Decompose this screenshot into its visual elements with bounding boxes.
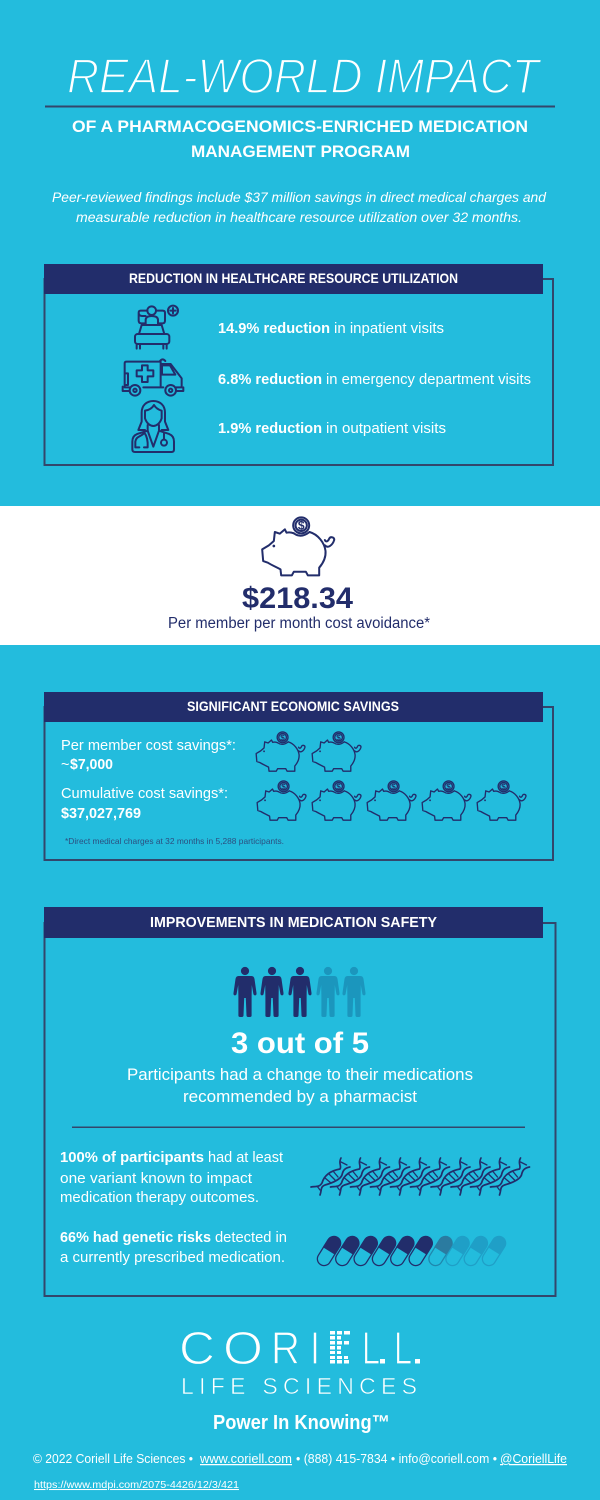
panel: economic savings bbox=[44, 692, 553, 860]
text: per member cost savings: $7,000 bbox=[70, 757, 113, 773]
footer contact line: © 2022 Coriell Life Sciences • bbox=[33, 1452, 193, 1466]
panel heading: improvements in medication safety bbox=[44, 907, 543, 938]
text: cumulative cost savings: $37,027,769 bbox=[61, 806, 141, 822]
logo wordmark: C bbox=[179, 1322, 215, 1374]
logo wordmark: R bbox=[271, 1322, 300, 1374]
panel heading: significant economic savings: SIGNIFICANT ECONOMIC SAVINGS bbox=[187, 699, 399, 714]
stat: emergency department visits: 6.8% reduction bbox=[218, 372, 322, 388]
caption: pharmacist recommendation: recommended by a pharmacist bbox=[183, 1088, 417, 1106]
icons: DNA helices bbox=[311, 1158, 530, 1195]
panel heading: significant economic savings bbox=[44, 692, 543, 722]
logo wordmark: L bbox=[362, 1322, 380, 1374]
text: per member cost savings: Per member cost savings*: bbox=[61, 738, 236, 754]
icons: ten capsules, six highlighted bbox=[314, 1233, 509, 1268]
caption: cost avoidance: Per member per month cost avoidance* bbox=[168, 615, 430, 632]
stat: emergency department visits: in emergency department visits bbox=[326, 372, 531, 388]
stat: inpatient visits bbox=[218, 321, 444, 337]
logo line: life sciences: LIFE SCIENCES bbox=[181, 1373, 417, 1399]
logo wordmark: L bbox=[394, 1322, 412, 1374]
icons: per member piggy banks bbox=[256, 732, 361, 771]
text: cumulative cost savings: Cumulative cost savings*: bbox=[61, 786, 228, 802]
stat: outpatient visits: in outpatient visits bbox=[326, 421, 446, 437]
intro paragraph bbox=[52, 189, 547, 225]
caption: pharmacist recommendation: Participants had a change to their medications bbox=[127, 1066, 473, 1084]
logo wordmark: O bbox=[223, 1322, 263, 1374]
title: REAL-WORLD IMPACT bbox=[67, 50, 542, 104]
text: per member cost savings: ~ bbox=[61, 757, 69, 773]
stat: inpatient visits: in inpatient visits bbox=[334, 321, 444, 337]
logo pixel letter E bbox=[330, 1331, 420, 1364]
icon: piggy bank with coin bbox=[262, 517, 334, 575]
title underline bbox=[45, 106, 555, 108]
stat: inpatient visits: 14.9% reduction bbox=[218, 321, 330, 337]
footer contact line bbox=[33, 1452, 567, 1466]
panel heading: reduction in utilization: REDUCTION IN HEALTHCARE RESOURCE UTILIZATION bbox=[129, 271, 458, 286]
footer contact line: @CoriellLife bbox=[500, 1452, 567, 1466]
icon: hospital bed bbox=[135, 306, 178, 349]
tagline: Power In Knowing™ bbox=[213, 1412, 390, 1434]
text: genetic risks: 66% had genetic risks bbox=[60, 1230, 211, 1246]
text: genetic risks bbox=[60, 1230, 287, 1266]
text: variants: had at least bbox=[208, 1150, 283, 1166]
subtitle bbox=[72, 117, 528, 161]
text: cumulative cost savings bbox=[61, 786, 228, 822]
stat: 3 out of 5: 3 out of 5 bbox=[231, 1027, 369, 1060]
caption: pharmacist recommendation bbox=[127, 1066, 473, 1106]
subtitle: MANAGEMENT PROGRAM bbox=[191, 142, 410, 161]
text: variants: medication therapy outcomes. bbox=[60, 1190, 259, 1206]
footer contact line: • (888) 415-7834 • info@coriell.com • bbox=[296, 1452, 497, 1466]
stat: outpatient visits: 1.9% reduction bbox=[218, 421, 322, 437]
stat: emergency department visits bbox=[218, 372, 531, 388]
text: genetic risks: a currently prescribed medication. bbox=[60, 1250, 285, 1266]
panel: cost avoidance band bbox=[0, 506, 600, 645]
text: variants: 100% of participants bbox=[60, 1150, 204, 1166]
icon: doctor bbox=[132, 401, 174, 452]
text: genetic risks: detected in bbox=[215, 1230, 287, 1246]
panel heading: improvements in medication safety: IMPROVEMENTS IN MEDICATION SAFETY bbox=[150, 915, 437, 931]
intro paragraph: measurable reduction in healthcare resource utilization over 32 months. bbox=[76, 209, 522, 225]
icons: cumulative piggy banks bbox=[257, 781, 526, 820]
footer contact line: www.coriell.com bbox=[199, 1452, 292, 1466]
intro paragraph: Peer-reviewed findings include $37 million savings in direct medical charges and bbox=[52, 189, 547, 205]
stat: outpatient visits bbox=[218, 421, 446, 437]
panel heading: reduction in utilization bbox=[44, 264, 543, 294]
panel: healthcare resource utilization bbox=[44, 264, 553, 465]
footnote: *Direct medical charges at 32 months in 5,288 participants. bbox=[65, 836, 284, 846]
subtitle: OF A PHARMACOGENOMICS-ENRICHED MEDICATION bbox=[72, 117, 528, 136]
logo wordmark: I bbox=[310, 1322, 320, 1374]
logo: Coriell Life Sciences bbox=[179, 1322, 420, 1434]
stat: per member per month: $218.34 bbox=[242, 582, 353, 615]
source link: https://www.mdpi.com/2075-4426/12/3/421 bbox=[34, 1479, 239, 1491]
logo wordmark bbox=[179, 1322, 412, 1374]
text: variants bbox=[60, 1150, 283, 1206]
text: variants: one variant known to impact bbox=[60, 1171, 252, 1187]
text: per member cost savings bbox=[61, 738, 236, 773]
icon: ambulance bbox=[123, 359, 183, 396]
icons: five people, three highlighted bbox=[233, 967, 366, 1017]
panel: medication safety bbox=[44, 907, 556, 1296]
